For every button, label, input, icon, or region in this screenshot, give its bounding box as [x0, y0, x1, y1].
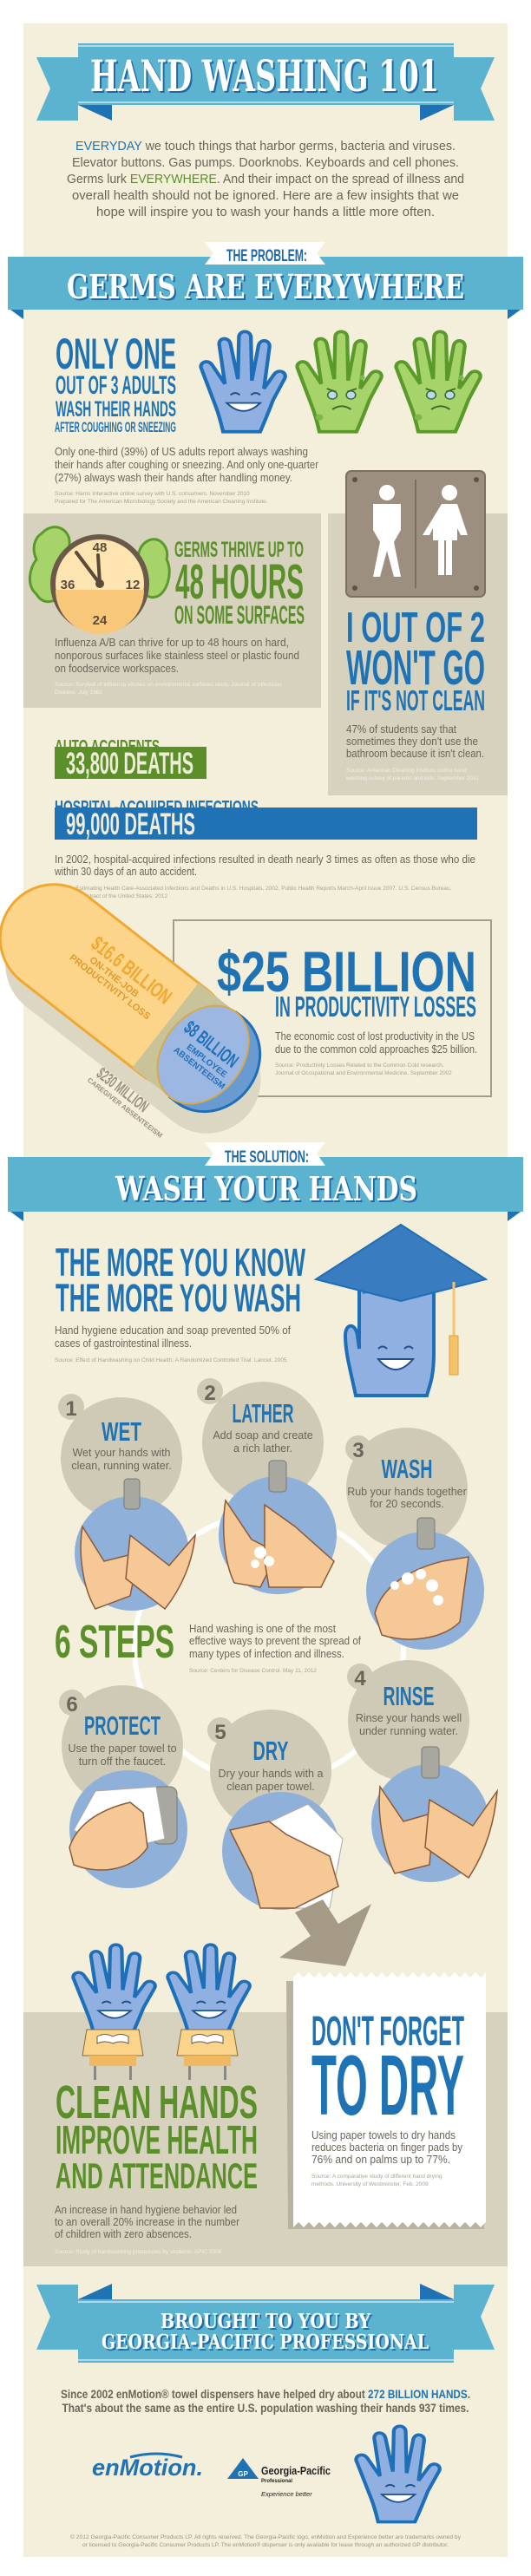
- step 3: wash: Rub your hands together: [347, 1486, 467, 1498]
- sponsor ribbon: BROUGHT TO YOU BY: [161, 2310, 370, 2333]
- panel: restroom: [328, 471, 508, 795]
- logo: enMotion: enMotion.: [92, 2455, 203, 2481]
- step 4: rinse: 4: [354, 1667, 366, 1690]
- panel: 48 hours: ON SOME SURFACES: [174, 601, 305, 630]
- panel: 25 billion productivity losses: Source: Productivity Losses Related to the Common Cold research.: [275, 1062, 444, 1069]
- panel: 48 hours: 48 HOURS: [175, 554, 304, 610]
- text block: 2002 infections: [54, 853, 475, 899]
- step 2: lather: 2: [204, 1382, 216, 1405]
- icon: germs and clock: 12: [126, 578, 140, 592]
- logo: Georgia-Pacific Professional: Georgia-Pacific: [261, 2465, 331, 2477]
- decorative ring linking steps: [134, 1514, 403, 1782]
- intro text: Germs lurk EVERYWHERE. And their impact on the spread of illness and: [67, 173, 464, 186]
- icon: green germy hand 1: [298, 331, 382, 432]
- step 2: lather: Add soap and create: [213, 1429, 313, 1442]
- section banner: the problem: THE PROBLEM:: [226, 247, 307, 265]
- icon: smiling blue hand: [356, 2426, 440, 2522]
- section banner: the problem: [8, 242, 523, 319]
- icon: graduate hand: [316, 1225, 486, 1396]
- text block: 6 steps: many types of infection and illness.: [189, 1648, 344, 1660]
- icon: germs and clock: [30, 527, 169, 634]
- step 6: protect: 6: [66, 1693, 78, 1716]
- panel: 48 hours: Source: Survival of influenza viruses on environmental surfaces study. Journal of Infectious: [55, 682, 282, 688]
- chart: productivity pill: ABSENTEEISM: [171, 1045, 226, 1092]
- panel: clean hands improve health: AND ATTENDANCE: [56, 2155, 258, 2196]
- icon: hand at desk 2: [167, 1945, 250, 2080]
- panel: clean hands improve health: CLEAN HANDS: [56, 2076, 258, 2128]
- text block: 6 steps: effective ways to prevent the spread of: [189, 1635, 361, 1647]
- text block: one-third stat: Only one-third (39%) of US adults report always washing: [55, 446, 308, 458]
- logo: Georgia-Pacific Professional: Professional: [261, 2479, 292, 2484]
- chart: productivity pill: EMPLOYEE: [185, 1043, 229, 1080]
- intro text: EVERYDAY we touch things that harbor germs, bacteria and viruses.: [75, 140, 456, 154]
- headline: the more you know: Hand hygiene education and soap prevented 50% of: [55, 1324, 291, 1337]
- panel: clean hands improve health: Source: Study of handwashing procedures by students. APIC 2008: [55, 2249, 222, 2255]
- intro text: hope will inspire you to wash your hands a little more often.: [96, 206, 435, 219]
- sponsor ribbon: GEORGIA-PACIFIC PROFESSIONAL: [102, 2331, 429, 2354]
- step 5: dry: DRY: [253, 1736, 289, 1766]
- panel: clean hands improve health: IMPROVE HEALTH: [56, 2117, 258, 2162]
- headline: only one out of 3 adults: ONLY ONE: [56, 330, 176, 378]
- headline: only one out of 3 adults: AFTER COUGHING OR SNEEZING: [55, 419, 176, 435]
- text block: 6 steps: [55, 1616, 361, 1674]
- bar: hospital-acquired infections: 99,000 DEATHS: [66, 807, 195, 841]
- step 6: protect: Use the paper towel to: [68, 1742, 177, 1755]
- intro text: Elevator buttons. Gas pumps. Doorknobs. Keyboards and cell phones.: [72, 156, 459, 170]
- panel: 48 hours: GERMS THRIVE UP TO: [174, 538, 304, 562]
- panel: clean hands improve health: [23, 1945, 508, 2266]
- step 5: dry: 5: [214, 1721, 226, 1744]
- panel: 25 billion productivity losses: due to the common cold approaches $25 billion.: [275, 1043, 477, 1056]
- panel: restroom: Source: American Cleaning Institute online hand: [346, 768, 467, 774]
- footer copyright: © 2012 Georgia-Pacific Consumer Products LP. All rights reserved. The Georgia-Pacific logo, enMotion and Experience better are trademarks owned by: [70, 2534, 462, 2540]
- text block: 2002 infections: In 2002, hospital-acquired infections resulted in death nearly 3 times as often as those who die: [55, 853, 475, 866]
- step 5: dry: clean paper towel.: [226, 1781, 315, 1793]
- icon: germs and clock: 36: [61, 578, 75, 592]
- text block: 272 billion hands: Since 2002 enMotion® towel dispensers have helped dry about 272 BILLION HANDS.: [61, 2388, 470, 2401]
- step 1: wet: Wet your hands with: [72, 1447, 171, 1459]
- step 4: rinse: RINSE: [384, 1681, 434, 1711]
- step 4: rinse: [347, 1660, 497, 1882]
- panel: clean hands improve health: An increase in hand hygiene behavior led: [55, 2204, 237, 2216]
- step 3: wash: for 20 seconds.: [370, 1498, 444, 1510]
- step 4: rinse: under running water.: [359, 1725, 458, 1737]
- panel: 48 hours: [23, 513, 321, 708]
- step 2: lather: a rich lather.: [233, 1442, 292, 1455]
- text block: one-third stat: Source: Harris Interactive online survey with U.S. consumers. November 2010: [55, 491, 250, 497]
- chart: productivity pill: PRODUCTIVITY LOSS: [68, 952, 152, 1022]
- icon: germs and clock: 24: [93, 613, 108, 628]
- icon: hand at desk 1: [73, 1945, 155, 2080]
- panel: 25 billion productivity losses: [174, 920, 491, 1096]
- panel: 48 hours: Disease. July 1982: [55, 690, 102, 696]
- chart: productivity pill: $8 BILLION: [180, 1017, 243, 1072]
- bar: auto accidents: AUTO ACCIDENTS: [55, 737, 160, 756]
- text block: 272 billion hands: [61, 2388, 470, 2415]
- headline: the more you know: THE MORE YOU KNOW: [56, 1240, 305, 1285]
- text block: one-third stat: Prepared for The American Microbiology Society and the American Cleaning Institute.: [55, 499, 268, 505]
- panel: 48 hours: Influenza A/B can thrive for up to 48 hours on hard,: [55, 637, 289, 649]
- step 3: wash: [345, 1428, 484, 1650]
- section banner: the solution: [8, 1142, 523, 1221]
- text block: 272 billion hands: That's about the same as the entire U.S. population washing their hands 937 times.: [62, 2402, 469, 2415]
- headline: only one out of 3 adults: WASH THEIR HANDS: [56, 397, 176, 422]
- chart: productivity pill: $16.6 BILLION: [87, 932, 176, 1009]
- step 3: wash: 3: [352, 1439, 364, 1462]
- panel: 48 hours: on foodservice workspaces.: [55, 663, 179, 675]
- text block: 6 steps: Source: Centers for Disease Control. May 11, 2012: [189, 1668, 317, 1674]
- sponsor ribbon: GEORGIA-PACIFIC PROFESSIONAL: [103, 2332, 430, 2356]
- callout: don't forget to dry (paper towel): Using paper towels to dry hands: [311, 2129, 456, 2141]
- callout: don't forget to dry (paper towel): reduces bacteria on finger pads by: [311, 2141, 463, 2154]
- bar: auto accidents: [55, 737, 206, 781]
- intro text: overall health should not be ignored. Here are a few insights that we: [72, 189, 459, 203]
- sponsor ribbon: BROUGHT TO YOU BY: [162, 2311, 372, 2335]
- headline: the more you know: Source: Effect of Handwashing on Child Health: A Randomized Controlled Trial. Lancet. 2005: [55, 1357, 287, 1363]
- icon: restroom sign: [346, 471, 485, 597]
- callout: don't forget to dry (paper towel): Source: A comparative study of different hand drying: [311, 2174, 442, 2180]
- text block: 2002 infections: Source: Estimating Health Care-Associated Infections and Deaths in U.S. Hospitals, 2002. Public Health Reports March-April Issue 2007. U.S. Census Bureau,: [55, 886, 452, 892]
- icon: germs and clock: 48: [93, 540, 107, 555]
- logo: Georgia-Pacific Professional: GP: [238, 2470, 248, 2478]
- headline: the more you know: cases of gastrointestinal illness.: [55, 1337, 192, 1350]
- text block: 2002 infections: Statistical Abstract of the United States: 2012: [55, 893, 167, 899]
- step 2: lather: [197, 1378, 337, 1594]
- bar: hospital-acquired infections: HOSPITAL-ACQUIRED INFECTIONS: [55, 798, 259, 817]
- chart: productivity pill: [0, 863, 282, 1155]
- icon: blue happy hand: [201, 331, 285, 432]
- text block: one-third stat: [55, 446, 318, 505]
- logo: Georgia-Pacific Professional: [227, 2458, 331, 2498]
- panel: restroom: washing survey of parents and kids. September 2011: [345, 775, 479, 781]
- logo: Georgia-Pacific Professional: Experience better: [261, 2490, 312, 2498]
- chart: productivity pill: CAREGIVER ABSENTEEISM: [86, 1076, 164, 1140]
- headline: only one out of 3 adults: OUT OF 3 ADULTS: [56, 371, 176, 400]
- callout: don't forget to dry (paper towel): [286, 1972, 486, 2229]
- text block: one-third stat: (27%) always wash their hands after handling money.: [55, 472, 292, 484]
- intro text: [67, 140, 464, 219]
- bar: hospital-acquired infections: [55, 798, 477, 841]
- headline: the more you know: [55, 1240, 305, 1363]
- section banner: the solution: WASH YOUR HANDS: [116, 1171, 419, 1210]
- panel: clean hands improve health: to an overall 20% increase in the number: [55, 2216, 239, 2228]
- text block: 2002 infections: within 30 days of an auto accident.: [54, 866, 197, 878]
- step 6: protect: turn off the faucet.: [79, 1755, 166, 1768]
- step 1: wet: clean, running water.: [71, 1460, 172, 1472]
- callout: don't forget to dry (paper towel): methods. University of Westminster, Feb. 2009: [311, 2181, 429, 2187]
- panel: 25 billion productivity losses: Journal of Occupational and Environmental Medicine. September 2002: [275, 1070, 452, 1076]
- panel: restroom: 47% of students say that: [346, 723, 456, 736]
- panel: 25 billion productivity losses: The economic cost of lost productivity in the US: [275, 1030, 475, 1043]
- step 6: protect: PROTECT: [84, 1710, 161, 1741]
- step 5: dry: [207, 1710, 343, 1910]
- panel: clean hands improve health: of children with zero absences.: [55, 2228, 192, 2240]
- icon: green germy hand 2: [397, 331, 481, 432]
- step 1: wet: WET: [102, 1416, 141, 1447]
- panel: restroom: bathroom because it isn't clean.: [346, 748, 484, 760]
- panel: 48 hours: nonporous surfaces like stainless steel or plastic found: [55, 650, 299, 662]
- step 2: lather: LATHER: [233, 1398, 293, 1429]
- title ribbon: [36, 43, 495, 121]
- step 4: rinse: Rinse your hands well: [356, 1712, 462, 1724]
- headline: the more you know: THE MORE YOU WASH: [56, 1276, 301, 1320]
- footer copyright: [70, 2534, 462, 2548]
- step 3: wash: WASH: [382, 1454, 432, 1484]
- chart: productivity pill: $230 MILLION: [93, 1064, 152, 1116]
- chart: productivity pill: ON-THE-JOB: [88, 955, 141, 1000]
- text block: 6 steps: Hand washing is one of the most: [189, 1623, 336, 1635]
- section banner: the solution: THE SOLUTION:: [225, 1148, 309, 1167]
- callout: don't forget to dry (paper towel): 76% and on palms up to 77%.: [311, 2154, 450, 2166]
- text block: 6 steps: 6 STEPS: [55, 1616, 174, 1668]
- step 5: dry: Dry your hands with a: [219, 1768, 323, 1780]
- step 6: protect: [59, 1685, 187, 1888]
- arrow: down to drying: [279, 1899, 371, 1966]
- headline: only one out of 3 adults: [55, 330, 176, 435]
- step 1: wet: 1: [65, 1397, 77, 1421]
- footer copyright: or licensed to Georgia-Pacific Consumer Products LP. The enMotion® dispenser is only available for lease through an authorized GP distributor.: [82, 2541, 449, 2548]
- panel: restroom: sometimes they don't use the: [346, 736, 478, 748]
- section banner: the solution: WASH YOUR HANDS: [115, 1169, 417, 1208]
- sponsor ribbon: [36, 2284, 495, 2363]
- bar: auto accidents: 33,800 DEATHS: [66, 747, 193, 781]
- step 1: wet: [58, 1394, 195, 1611]
- text block: one-third stat: their hands after coughing or sneezing. And only one-quarter: [55, 459, 318, 471]
